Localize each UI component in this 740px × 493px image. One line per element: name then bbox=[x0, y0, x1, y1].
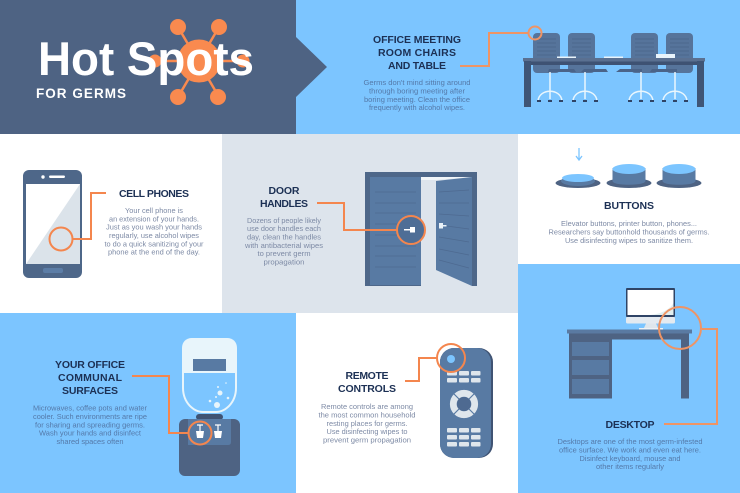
text block: meeting room advice: through boring meeting after bbox=[369, 86, 466, 96]
text block: remote controls advice: resting places for germs. bbox=[326, 419, 408, 428]
icon: remote control bbox=[440, 348, 493, 458]
heading: remote controls: CONTROLS bbox=[338, 383, 396, 395]
text block: meeting room advice bbox=[364, 78, 470, 112]
text block: meeting room advice: frequently with alcohol wipes. bbox=[369, 103, 465, 112]
text block: buttons advice: Researchers say buttonhold thousands of germs. bbox=[548, 228, 710, 236]
text block: communal surfaces advice: for sharing and spreading germs. bbox=[35, 420, 145, 430]
icon: conference table and chairs bbox=[523, 33, 705, 107]
icon: desk and monitor bbox=[567, 288, 692, 398]
text block: desktop advice: office surface. We work and even eat here. bbox=[559, 446, 701, 454]
heading: office meeting room chairs and table: ROOM CHAIRS bbox=[378, 47, 456, 59]
text block: door handles advice bbox=[244, 216, 323, 266]
callout connector: water tap bbox=[132, 376, 212, 444]
heading: your office communal surfaces bbox=[55, 359, 125, 397]
heading: cell phones: CELL PHONES bbox=[119, 188, 189, 200]
text block: desktop advice: Disinfect keyboard, mouse and bbox=[580, 454, 680, 463]
callout connector: phone bbox=[50, 193, 106, 250]
heading: door handles: HANDLES bbox=[260, 198, 308, 210]
heading: office meeting room chairs and table: AND TABLE bbox=[388, 60, 446, 72]
panel: title banner bbox=[0, 0, 327, 134]
callout connector: desk bbox=[659, 307, 717, 424]
text block: remote controls advice: the most common household bbox=[318, 410, 416, 420]
text block: door handles advice: use door handles each bbox=[247, 224, 321, 233]
heading: your office communal surfaces: YOUR OFFICE bbox=[55, 359, 125, 371]
text block: communal surfaces advice: shared spaces often bbox=[56, 437, 124, 446]
icon: down arrow bbox=[576, 148, 582, 160]
text block: cell phones advice bbox=[104, 206, 204, 256]
text block: cell phones advice: regularly, use alcohol wipes bbox=[109, 231, 199, 240]
text block: buttons advice bbox=[548, 219, 710, 245]
heading: remote controls: REMOTE bbox=[346, 370, 388, 382]
callout connector: door handle bbox=[317, 203, 425, 244]
subtitle: FOR GERMS bbox=[36, 86, 126, 101]
text block: door handles advice: propagation bbox=[264, 258, 304, 266]
text block: remote controls advice: Remote controls are among bbox=[321, 402, 413, 411]
text block: cell phones advice: Just as you wash your hands bbox=[106, 222, 202, 232]
text block: door handles advice: day, clean the handles bbox=[247, 232, 321, 242]
text block: buttons advice: Use disinfecting wipes to sanitize them. bbox=[565, 236, 693, 245]
icon: door bbox=[365, 172, 477, 286]
text block: door handles advice: with antibacterial wipes bbox=[244, 241, 323, 250]
panel: desktop bbox=[518, 264, 740, 493]
callout connector: chair bbox=[460, 26, 542, 66]
text block: cell phones advice: phone at the end of the day. bbox=[108, 248, 200, 256]
title: Hot Spots bbox=[38, 32, 254, 85]
text block: communal surfaces advice bbox=[33, 404, 148, 446]
heading: remote controls bbox=[338, 370, 396, 395]
panel: remote controls bbox=[296, 313, 518, 493]
callout connector: remote bbox=[405, 344, 465, 381]
text block: meeting room advice: Germs don't mind sitting around bbox=[364, 78, 470, 87]
text block: communal surfaces advice: Microwaves, coffee pots and water bbox=[33, 404, 148, 412]
text block: remote controls advice: prevent germ propagation bbox=[323, 436, 411, 444]
heading: your office communal surfaces: SURFACES bbox=[62, 385, 118, 397]
icon: phone bbox=[23, 170, 82, 278]
panel: door handles bbox=[222, 134, 518, 313]
panel: cell phones bbox=[0, 134, 222, 313]
heading: door handles bbox=[260, 185, 308, 210]
text block: communal surfaces advice: cooler. Such environments are ripe bbox=[33, 412, 147, 421]
text block: buttons advice: Elevator buttons, printer button, phones... bbox=[561, 219, 697, 228]
text block: desktop advice: Desktops are one of the most germ-infested bbox=[558, 437, 703, 446]
panel: office meeting room chairs and table bbox=[296, 0, 740, 134]
text block: door handles advice: Dozens of people likely bbox=[247, 216, 321, 225]
icon: water cooler bbox=[179, 338, 240, 476]
text block: meeting room advice: boring meeting. Clean the office bbox=[364, 95, 470, 104]
heading: office meeting room chairs and table: OFFICE MEETING bbox=[373, 34, 461, 46]
panel: buttons bbox=[518, 134, 740, 264]
text block: cell phones advice: Your cell phone is bbox=[125, 206, 183, 215]
panel: office communal surfaces bbox=[0, 313, 296, 493]
text block: cell phones advice: an extension of your hands. bbox=[109, 214, 199, 224]
text block: remote controls advice: Use disinfecting wipes to bbox=[326, 427, 408, 436]
icon: germ bbox=[149, 20, 249, 104]
heading: your office communal surfaces: COMMUNAL bbox=[58, 372, 123, 384]
text block: door handles advice: to prevent germ bbox=[258, 249, 311, 258]
heading: door handles: DOOR bbox=[268, 185, 300, 197]
text block: cell phones advice: to do a quick sanitizing of your bbox=[104, 240, 204, 248]
icon: three buttons bbox=[556, 164, 702, 188]
text block: desktop advice: other items regularly bbox=[596, 462, 664, 471]
heading: buttons: BUTTONS bbox=[604, 200, 654, 212]
text block: communal surfaces advice: Wash your hands and disinfect bbox=[39, 428, 141, 438]
text block: desktop advice bbox=[558, 437, 703, 471]
text block: remote controls advice bbox=[318, 402, 416, 444]
heading: office meeting room chairs and table bbox=[373, 34, 461, 72]
heading: desktop: DESKTOP bbox=[606, 419, 654, 431]
